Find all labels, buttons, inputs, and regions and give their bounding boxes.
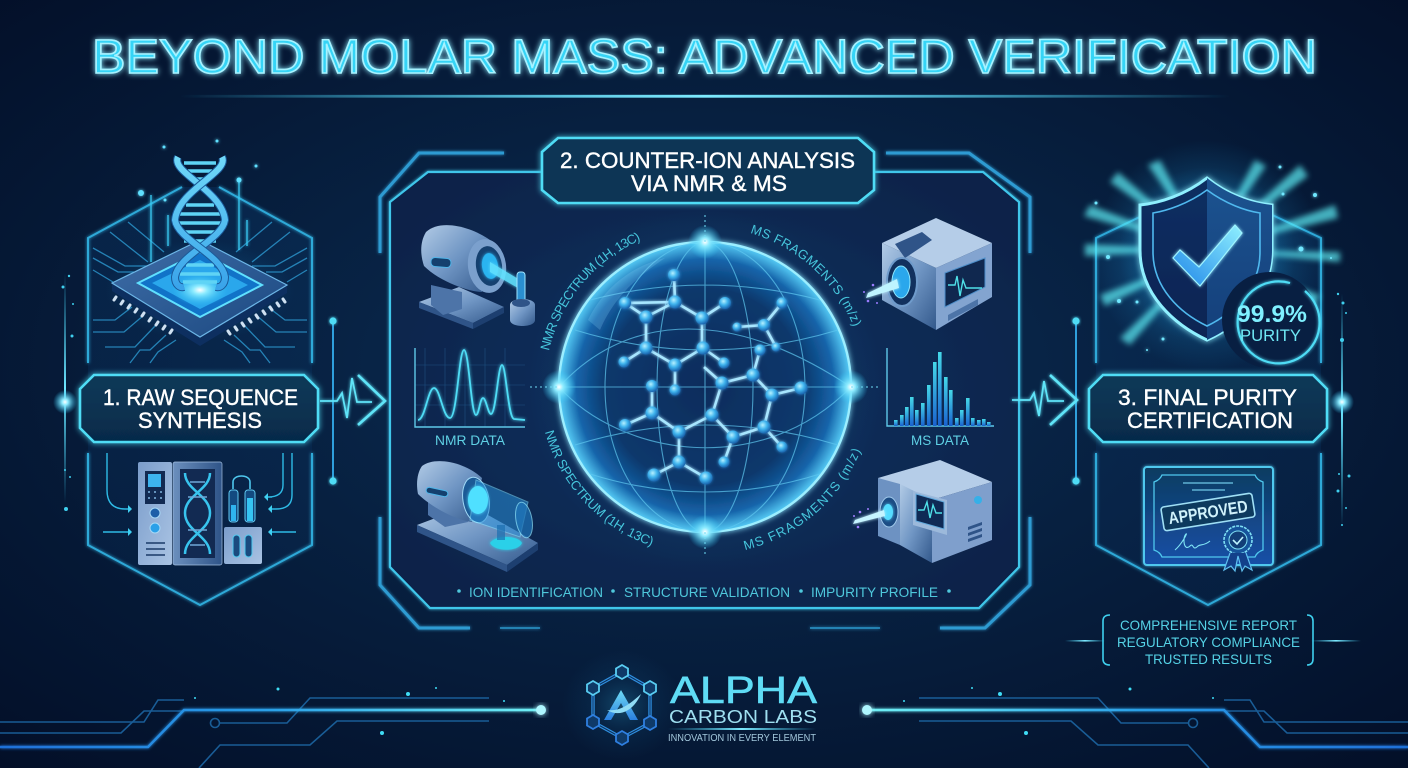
badge: 99.9% purity — [1222, 272, 1320, 368]
icon: NMR magnet bottom — [417, 461, 538, 572]
chart: NMR data — [415, 348, 525, 448]
panel inner frame — [390, 172, 1019, 608]
footer circuit right — [862, 687, 1408, 768]
icon: approved certificate: APPROVED — [1167, 497, 1249, 528]
logo mark — [562, 650, 682, 760]
logo: Alpha Carbon Labs: ALPHA — [670, 670, 818, 712]
label: step 1 — [80, 375, 318, 442]
icon: DNA helix — [175, 157, 225, 287]
left side glow line — [53, 273, 77, 511]
heading: step 2: VIA NMR & MS — [631, 171, 787, 196]
icon: microchip — [105, 240, 295, 346]
light columns — [151, 180, 247, 262]
label: step 3 — [1089, 375, 1327, 442]
title: BEYOND MOLAR MASS: ADVANCED VERIFICATION — [92, 31, 1317, 84]
title underline — [180, 95, 1230, 98]
callout: report benefits: TRUSTED RESULTS — [1145, 651, 1272, 667]
arrow: step 1 to step 2 — [320, 317, 385, 485]
icon: synthesizer equipment — [138, 462, 262, 565]
sphere with molecule — [530, 215, 880, 556]
circuit traces — [93, 222, 307, 363]
heading: step 2: 2. COUNTER-ION ANALYSIS — [560, 148, 855, 173]
panel outer frame — [380, 153, 1030, 628]
chart: MS data — [887, 348, 994, 448]
arrow: step 2 to step 3 — [1012, 317, 1080, 485]
shield rays — [1084, 140, 1340, 370]
icon: NMR magnet top — [419, 225, 535, 329]
sphere sparkle points — [542, 225, 868, 549]
icon: shield with check — [1140, 178, 1272, 340]
panel: step 2 counter-ion analysis — [376, 132, 1034, 632]
logo: Alpha Carbon Labs: CARBON LABS — [669, 706, 817, 727]
logo: Alpha Carbon Labs — [562, 650, 818, 760]
icon: mass spectrometer bottom — [853, 460, 992, 563]
hexagon frame — [88, 187, 312, 605]
molecule atoms — [618, 269, 808, 484]
label: step 1: SYNTHESIS — [138, 408, 262, 433]
bullet list: ION IDENTIFICATION — [469, 584, 603, 600]
sphere halo — [527, 209, 883, 565]
flow arrows — [103, 453, 296, 536]
glass highlight — [588, 258, 665, 330]
panel: step 1 raw sequence synthesis — [80, 140, 318, 605]
hexagon frame — [1096, 212, 1321, 605]
label: step 3: 3. FINAL PURITY — [1118, 385, 1297, 410]
badge: 99.9% purity: 99.9% — [1237, 301, 1307, 328]
icon: mass spectrometer top — [863, 218, 992, 330]
chart: NMR data: NMR DATA — [435, 432, 506, 448]
badge: 99.9% purity: PURITY — [1240, 327, 1301, 345]
icon: approved certificate — [1144, 467, 1273, 571]
bullet list — [457, 584, 951, 600]
footer circuit left — [0, 687, 546, 768]
label: step 3: CERTIFICATION — [1127, 408, 1293, 433]
curved labels — [540, 224, 862, 550]
curved labels: NMR SPECTRUM (1H, 13C) — [540, 232, 640, 350]
callout: report benefits — [1065, 615, 1361, 667]
chart: MS data: MS DATA — [911, 432, 970, 448]
hexagon outline — [88, 187, 312, 605]
heading: step 2 — [542, 138, 874, 203]
hexagon outline — [1096, 212, 1321, 605]
callout: report benefits: COMPREHENSIVE REPORT — [1120, 617, 1297, 633]
callout: report benefits: REGULATORY COMPLIANCE — [1117, 634, 1300, 650]
bullet list: IMPURITY PROFILE — [811, 584, 938, 600]
label: step 1: 1. RAW SEQUENCE — [103, 385, 298, 410]
panel: step 3 final purity certification — [1065, 140, 1361, 667]
curved labels: NMR SPECTRUM (1H, 13C) — [545, 430, 653, 548]
molecule bonds — [624, 275, 801, 478]
curved labels: MS FRAGMENTS (m/z) — [751, 224, 862, 326]
curved labels: MS FRAGMENTS (m/z) — [744, 449, 862, 550]
logo: Alpha Carbon Labs: INNOVATION IN EVERY ELEMENT — [668, 733, 816, 744]
bullet list: STRUCTURE VALIDATION — [624, 584, 790, 600]
right side glow line — [1330, 293, 1354, 527]
